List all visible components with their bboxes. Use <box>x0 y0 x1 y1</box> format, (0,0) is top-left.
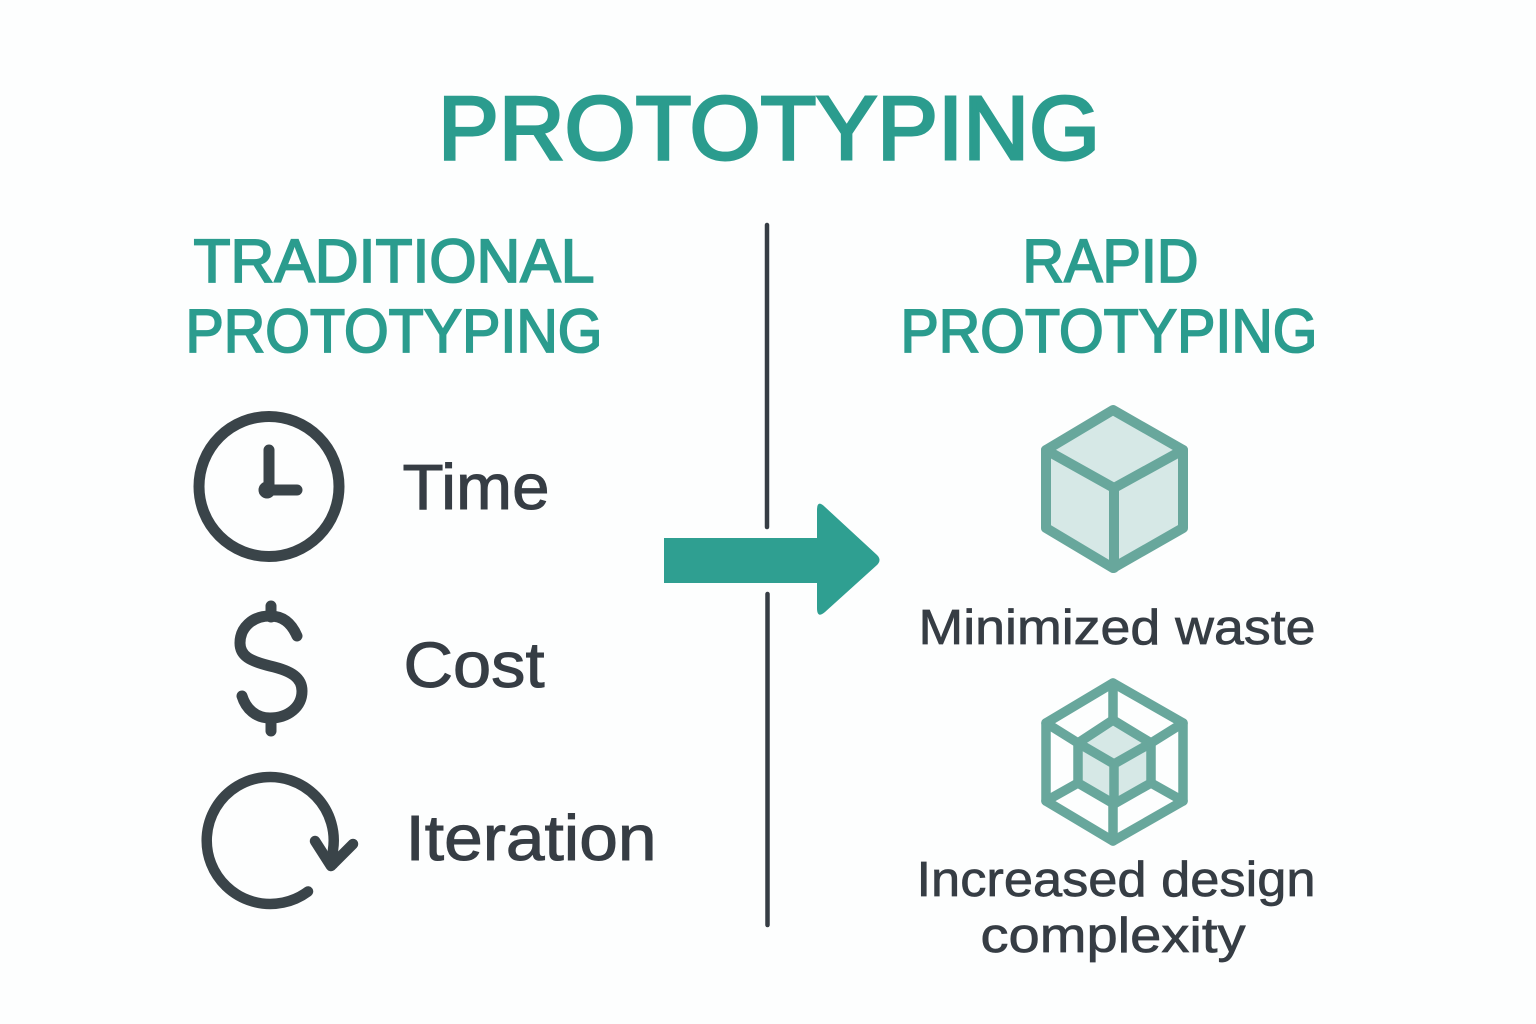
icon: dollar sign <box>240 606 302 731</box>
icon: iteration arrow <box>207 777 353 904</box>
title: PROTOTYPING <box>438 79 1100 179</box>
label: minimized waste: Minimized waste <box>918 601 1316 655</box>
panel: rapid prototyping <box>900 227 1318 963</box>
heading: rapid prototyping <box>900 227 1318 365</box>
heading: traditional prototyping: PROTOTYPING <box>186 297 602 365</box>
icon: clock <box>199 416 339 556</box>
heading: traditional prototyping: TRADITIONAL <box>194 227 594 295</box>
label: cost: Cost <box>404 629 545 701</box>
icon: solid cube <box>1046 410 1183 568</box>
divider line <box>765 225 770 925</box>
label: time: Time <box>402 451 550 523</box>
heading: traditional prototyping <box>186 227 602 365</box>
label: increased design complexity <box>916 853 1316 963</box>
heading: rapid prototyping: PROTOTYPING <box>900 297 1318 365</box>
label: increased design complexity: Increased design <box>916 853 1316 907</box>
heading: rapid prototyping: RAPID <box>1022 227 1198 295</box>
icon: lattice cube <box>1046 683 1183 841</box>
arrow <box>664 504 880 615</box>
panel: traditional prototyping <box>186 227 656 904</box>
label: increased design complexity: complexity <box>980 909 1246 963</box>
label: iteration: Iteration <box>406 802 656 874</box>
